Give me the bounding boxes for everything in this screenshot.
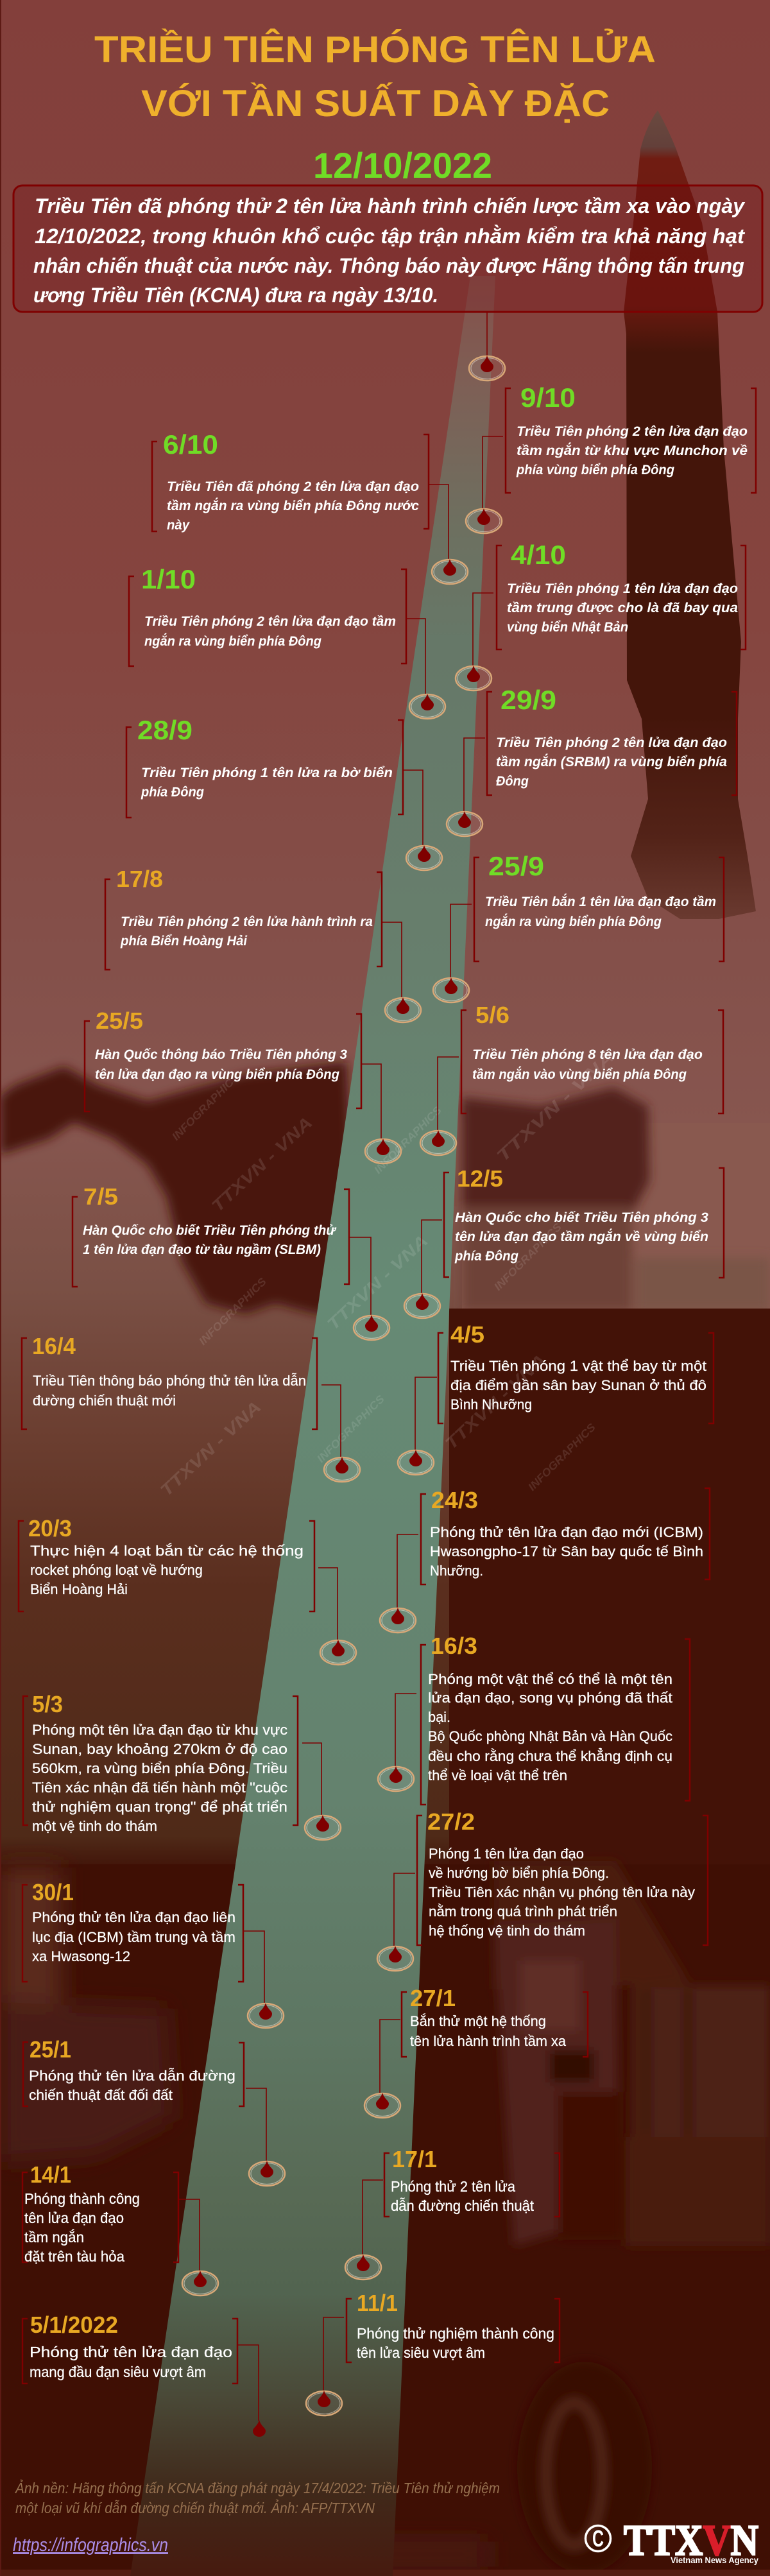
intro panel: Triều Tiên đã phóng thử 2 tên lửa hành trình chiến lược tầm xa vào ngày <box>35 194 746 218</box>
event 1/10: 1/10 <box>141 564 196 594</box>
event 14/1: tầm ngắn <box>24 2229 84 2245</box>
event 28/9: 28/9 <box>137 715 193 745</box>
event 25/9: Triều Tiên bắn 1 tên lửa đạn đạo tầm <box>485 895 716 909</box>
event 17/8: phía Biển Hoàng Hải <box>120 934 248 949</box>
event 5/3: Tiên xác nhận đã tiến hành một "cuộc <box>32 1780 287 1796</box>
event 1/10 <box>129 564 445 719</box>
event 24/3: Nhưỡng. <box>430 1563 483 1579</box>
event 25/1: chiến thuật đất đối đất <box>29 2087 173 2103</box>
event 28/9: Triều Tiên phóng 1 tên lửa ra bờ biển <box>141 766 393 780</box>
event 5/3: một vệ tinh do thám <box>32 1818 157 1834</box>
event 11/1: 11/1 <box>357 2290 398 2316</box>
event 5/1/2022: 5/1/2022 <box>30 2312 118 2338</box>
photo caption <box>14 2478 500 2516</box>
event 5/6: Triều Tiên phóng 8 tên lửa đạn đạo <box>472 1047 703 1062</box>
watermarks: INFOGRAPHICS <box>372 1104 444 1176</box>
logo: TTXVN: TTXVN <box>624 2516 758 2564</box>
website link: https://infographics.vn <box>13 2535 168 2555</box>
event 16/3 <box>378 1633 690 1805</box>
event 4/10: Triều Tiên phóng 1 tên lửa đạn đạo <box>507 581 738 596</box>
event 27/2: 27/2 <box>427 1808 475 1835</box>
event 5/3 <box>23 1691 341 1840</box>
event 7/5: 1 tên lửa đạn đạo từ tàu ngầm (SLBM) <box>83 1242 321 1257</box>
event 5/3: thử nghiệm quan trọng" để phát triển <box>32 1799 287 1815</box>
event 16/3: Phóng một vật thể có thể là một tên <box>428 1671 672 1687</box>
event 6/10: tầm ngắn ra vùng biển phía Đông nước <box>167 499 419 513</box>
event 30/1: 30/1 <box>32 1879 74 1905</box>
logo: TTXVN: C <box>592 2525 604 2552</box>
event 4/10: vùng biển Nhật Bản <box>507 620 628 635</box>
event 5/3: 5/3 <box>32 1691 63 1717</box>
watermarks: INFOGRAPHICS <box>196 1275 269 1348</box>
watermarks: INFOGRAPHICS <box>526 1421 598 1493</box>
watermarks: INFOGRAPHICS <box>314 1393 387 1465</box>
watermarks: TTXVN - VNA <box>441 1350 550 1453</box>
event 29/9 <box>447 685 737 836</box>
event 17/1 <box>345 2146 560 2280</box>
event 29/9: tầm ngắn (SRBM) ra vùng biển phía <box>496 755 727 769</box>
event 11/1: tên lửa siêu vượt âm <box>357 2344 485 2361</box>
event 16/3: đều cho rằng chưa thể khẳng định cụ <box>428 1748 672 1764</box>
event 4/10 <box>456 540 746 691</box>
event 25/9: 25/9 <box>488 851 544 881</box>
event 9/10: tầm ngắn từ khu vực Munchon về <box>517 443 748 458</box>
event 12/5: Hàn Quốc cho biết Triều Tiên phóng 3 <box>455 1210 708 1225</box>
watermarks: INFOGRAPHICS <box>169 1070 242 1143</box>
event 5/3: 560km, ra vùng biển phía Đông. Triều <box>32 1760 287 1776</box>
event 4/5: 4/5 <box>450 1321 484 1348</box>
event 7/5: 7/5 <box>83 1183 118 1210</box>
watermarks <box>157 1047 619 1500</box>
event 24/3: Hwasongpho-17 từ Sân bay quốc tế Bình <box>430 1543 703 1559</box>
event 4/5: Triều Tiên phóng 1 vật thể bay từ một <box>450 1358 707 1374</box>
watermarks: TTXVN - VNA <box>157 1397 265 1500</box>
intro panel: nhân chiến thuật của nước này. Thông báo này được Hãng thông tấn trung <box>33 254 744 277</box>
event 14/1: tên lửa đạn đạo <box>24 2210 124 2226</box>
watermarks: TTXVN - VNA <box>493 1047 619 1165</box>
event 4/10: tầm trung được cho là đã bay qua <box>507 601 738 615</box>
event 9/10: 9/10 <box>520 382 576 413</box>
event 16/3: thể về loại vật thể trên <box>428 1767 567 1783</box>
photo caption: một loại vũ khí dẫn đường chiến thuật mới. Ảnh: AFP/TTXVN <box>15 2498 375 2516</box>
intro panel: 12/10/2022, trong khuôn khổ cuộc tập trận nhằm kiểm tra khả năng hạt <box>35 225 745 248</box>
rocket silhouette <box>624 110 756 919</box>
event 30/1: Phóng thử tên lửa đạn đạo liên <box>32 1909 235 1925</box>
event 25/9: ngắn ra vùng biển phía Đông <box>485 914 662 929</box>
event 30/1: lục địa (ICBM) tầm trung và tầm <box>32 1929 235 1945</box>
event 27/2: hệ thống vệ tinh do thám <box>429 1923 585 1939</box>
event 25/5 <box>85 1008 401 1163</box>
event 11/1 <box>306 2290 560 2416</box>
event 29/9: Đông <box>496 774 529 789</box>
event 17/8: 17/8 <box>116 866 163 892</box>
intro panel <box>13 185 762 312</box>
event 4/5 <box>398 1321 714 1475</box>
event 16/4: 16/4 <box>32 1333 76 1359</box>
event 14/1: Phóng thành công <box>24 2190 140 2207</box>
watermarks: TTXVN - VNA <box>323 1231 432 1334</box>
event 5/3: Phóng một tên lửa đạn đạo từ khu vực <box>32 1722 287 1738</box>
event 14/1: 14/1 <box>30 2161 71 2188</box>
watermarks: INFOGRAPHICS <box>492 1221 564 1293</box>
event 12/5: phía Đông <box>454 1249 518 1264</box>
event 25/1: Phóng thử tên lửa dẫn đường <box>29 2068 235 2084</box>
title <box>94 29 656 125</box>
event 17/1: 17/1 <box>392 2146 437 2172</box>
event 30/1 <box>22 1879 284 2028</box>
event 14/1 <box>22 2161 218 2296</box>
event 16/3: bại. <box>428 1709 450 1725</box>
event 5/6: 5/6 <box>475 1002 509 1028</box>
event 17/8 <box>105 866 421 1022</box>
event 25/5: tên lửa đạn đạo ra vùng biển phía Đông <box>95 1067 339 1082</box>
event 20/3 <box>19 1515 356 1665</box>
event 25/9 <box>433 851 724 1002</box>
event 5/1/2022: Phóng thử tên lửa đạn đạo <box>30 2344 232 2360</box>
event 16/3: Bộ Quốc phòng Nhật Bản và Hàn Quốc <box>428 1728 672 1744</box>
event 6/10: Triều Tiên đã phóng 2 tên lửa đạn đạo <box>167 479 419 494</box>
event 7/5 <box>73 1183 389 1340</box>
event 16/4 <box>22 1333 360 1482</box>
event 5/6: tầm ngắn vào vùng biển phía Đông <box>472 1067 687 1082</box>
event 1/10: Triều Tiên phóng 2 tên lửa đạn đạo tầm <box>144 614 396 629</box>
event 20/3: Biển Hoàng Hải <box>30 1581 128 1597</box>
event 5/6 <box>420 1002 723 1155</box>
event 5/1/2022 <box>22 2312 266 2437</box>
event 27/1: 27/1 <box>410 1985 456 2011</box>
event 27/2: nằm trong quá trình phát triển <box>429 1903 617 1919</box>
event 16/3: lửa đạn đạo, song vụ phóng đã thất <box>428 1690 673 1706</box>
event 25/5: 25/5 <box>96 1008 143 1034</box>
event 27/1 <box>364 1985 588 2118</box>
event 20/3: Thực hiện 4 loạt bắn từ các hệ thống <box>30 1543 304 1559</box>
event 30/1: xa Hwasong-12 <box>32 1948 130 1964</box>
event 27/1: tên lửa hành trình tầm xa <box>410 2033 566 2049</box>
photo caption: Ảnh nền: Hãng thông tấn KCNA đăng phát ngày 17/4/2022: Triều Tiên thử nghiệm <box>14 2478 500 2496</box>
event 16/4: đường chiến thuật mới <box>33 1393 176 1409</box>
event 17/1: Phóng thử 2 tên lửa <box>391 2178 515 2195</box>
event 9/10 <box>466 382 756 533</box>
logo: TTXVN: Vietnam News Agency <box>671 2555 758 2565</box>
event 17/1: dẫn đường chiến thuật <box>391 2197 535 2214</box>
event 6/10 <box>152 429 468 584</box>
event 24/3: 24/3 <box>431 1487 478 1513</box>
event 12/5: 12/5 <box>457 1165 503 1192</box>
event 27/2: về hướng bờ biển phía Đông. <box>429 1865 609 1881</box>
event 9/10: Triều Tiên phóng 2 tên lửa đạn đạo <box>517 424 748 439</box>
event 20/3: 20/3 <box>28 1515 72 1541</box>
event 29/9: Triều Tiên phóng 2 tên lửa đạn đạo <box>496 735 727 750</box>
event 12/5 <box>404 1165 724 1318</box>
event 12/5: tên lửa đạn đạo tầm ngắn về vùng biển <box>455 1230 708 1244</box>
event 25/1 <box>23 2036 285 2186</box>
title: VỚI TẦN SUẤT DÀY ĐẶC <box>141 83 610 125</box>
event 27/2: Triều Tiên xác nhận vụ phóng tên lửa này <box>429 1884 696 1900</box>
event 14/1: đặt trên tàu hỏa <box>24 2248 124 2265</box>
title: TRIỀU TIÊN PHÓNG TÊN LỬA <box>94 29 656 71</box>
event 25/1: 25/1 <box>30 2036 71 2063</box>
light beam <box>130 276 495 2576</box>
event 27/2: Phóng 1 tên lửa đạn đạo <box>429 1846 584 1862</box>
event 4/5: địa điểm gần sân bay Sunan ở thủ đô <box>450 1377 706 1393</box>
event 7/5: Hàn Quốc cho biết Triều Tiên phóng thử <box>83 1223 337 1238</box>
event 4/5: Bình Nhưỡng <box>450 1396 532 1413</box>
event 1/10: ngắn ra vùng biển phía Đông <box>144 634 321 649</box>
intro panel: ương Triều Tiên (KCNA) đưa ra ngày 13/10. <box>33 284 438 307</box>
event 11/1: Phóng thử nghiệm thành công <box>357 2325 554 2342</box>
event 17/8: Triều Tiên phóng 2 tên lửa hành trình ra <box>121 914 373 929</box>
event 28/9: phía Đông <box>141 785 204 800</box>
watermarks: TTXVN - VNA <box>208 1113 316 1215</box>
event 27/2 <box>377 1808 708 1971</box>
event 16/3: 16/3 <box>431 1633 477 1659</box>
event 9/10: phía vùng biển phía Đông <box>516 463 674 477</box>
event 5/3: Sunan, bay khoảng 270km ở độ cao <box>32 1741 287 1757</box>
event 27/1: Bắn thử một hệ thống <box>410 2013 546 2029</box>
event 24/3 <box>380 1487 710 1633</box>
event 5/1/2022: mang đầu đạn siêu vượt âm <box>30 2364 206 2380</box>
event 6/10: 6/10 <box>163 429 218 459</box>
event 16/4: Triều Tiên thông báo phóng thử tên lửa dẫn <box>33 1373 306 1389</box>
event 29/9: 29/9 <box>501 685 556 715</box>
event 6/10: này <box>167 518 190 533</box>
event 28/9 <box>126 715 442 870</box>
event 20/3: rocket phóng loạt về hướng <box>30 1562 203 1578</box>
launch 12/10 pin <box>469 312 505 381</box>
event 25/5: Hàn Quốc thông báo Triều Tiên phóng 3 <box>95 1047 347 1062</box>
main date: 12/10/2022 <box>313 145 492 185</box>
event 24/3: Phóng thử tên lửa đạn đạo mới (ICBM) <box>430 1524 703 1540</box>
event 4/10: 4/10 <box>511 540 566 570</box>
